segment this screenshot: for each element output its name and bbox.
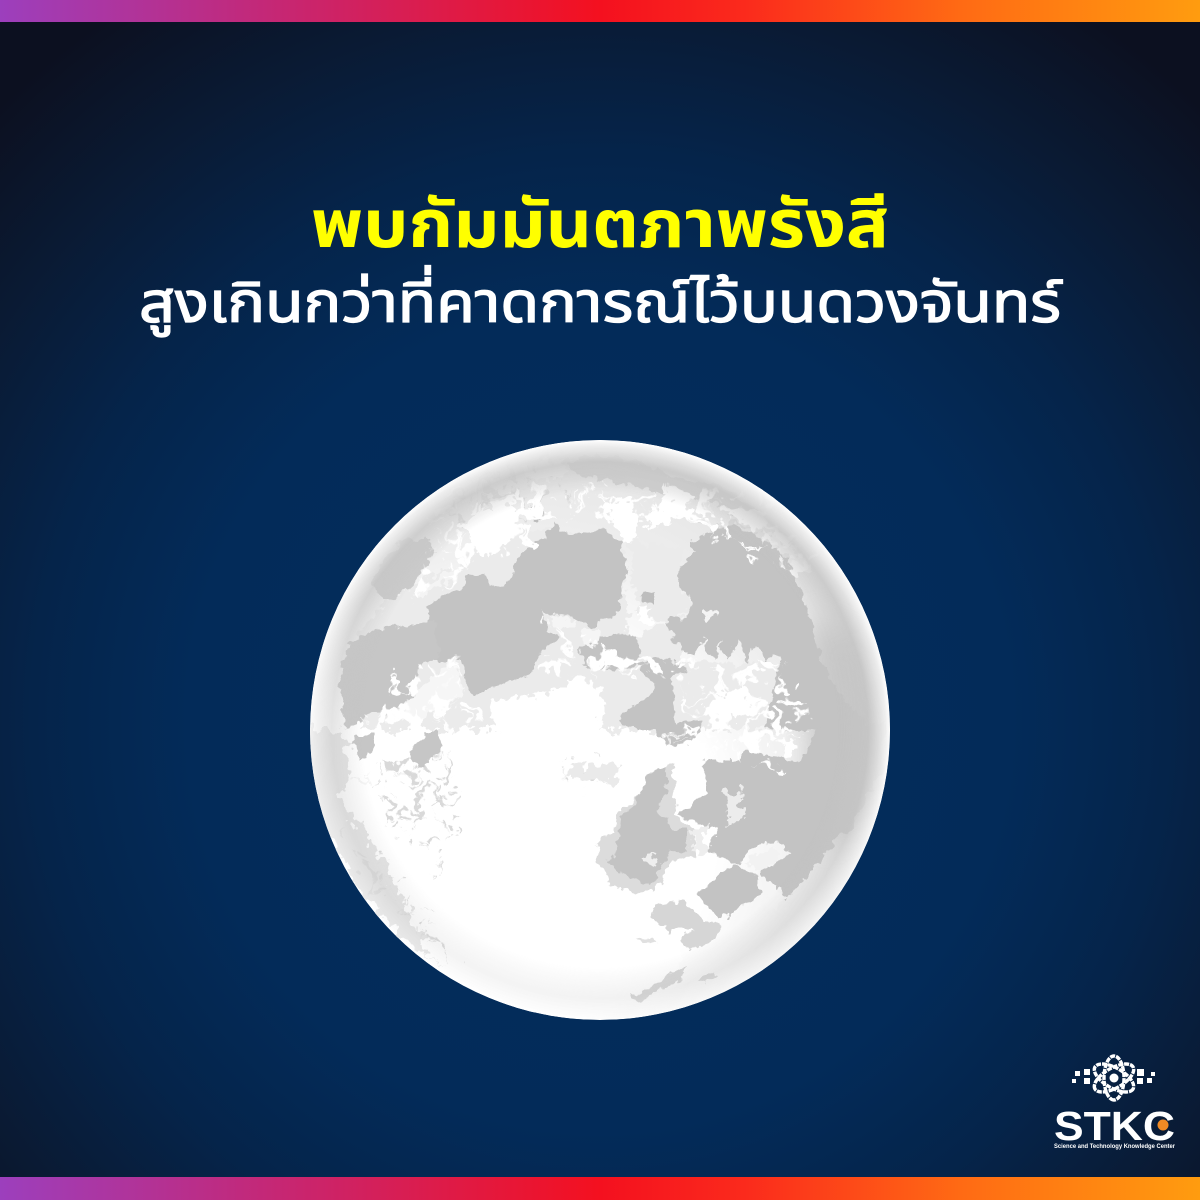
logo tagline: Science and Technology Knowledge Center bbox=[1054, 1144, 1176, 1150]
mare halo south bbox=[597, 763, 694, 893]
Sinus Medii region bbox=[618, 657, 702, 730]
bright white ray patches bbox=[402, 472, 798, 900]
limb shading ring bbox=[310, 440, 890, 1020]
grey flecks on the white region bbox=[372, 462, 756, 964]
Mare Imbrium bbox=[419, 522, 630, 698]
lunar maria: dark grey bbox=[338, 455, 887, 1002]
title line 1: yellow: พบกัมมันตภาพรังสี bbox=[311, 187, 889, 262]
southern grey patches bbox=[652, 900, 721, 950]
logo wordmark: STKC bbox=[1054, 1103, 1175, 1149]
logo icon: atom bbox=[1090, 1056, 1138, 1100]
moon light highlands bbox=[360, 566, 766, 737]
western small maria bbox=[354, 735, 373, 759]
large white region bbox=[362, 675, 606, 1016]
bottom gradient bar bbox=[0, 1177, 1200, 1200]
title bbox=[139, 187, 1063, 337]
small crater patch bbox=[528, 505, 544, 522]
Mare Serenitatis and Tranquillitatis bbox=[665, 524, 827, 732]
illustration: full moon bbox=[304, 440, 897, 1020]
top gradient bar bbox=[0, 0, 1200, 22]
Mare Fecunditatis side bbox=[679, 723, 887, 900]
logo orange dot bbox=[1158, 1120, 1168, 1130]
Mare Nectaris bbox=[698, 863, 761, 918]
white mottling on highlands bbox=[361, 487, 817, 770]
right limb dark crescent bbox=[805, 617, 897, 843]
light halo band at top bbox=[572, 468, 735, 516]
Mare Nubium bbox=[610, 767, 687, 885]
central small mare bbox=[579, 633, 641, 671]
Mare Humboldtianum patch bbox=[373, 537, 434, 600]
title line 2: white: สูงเกินกว่าที่คาดการณ์ไว้บนดวงจันทร์ bbox=[139, 265, 1063, 337]
lower-left grey limb band bbox=[304, 730, 453, 970]
logo: STKC bbox=[1054, 1056, 1176, 1150]
Oceanus Procellarum west bbox=[338, 620, 438, 730]
logo icon: data squares bbox=[1072, 1069, 1155, 1084]
